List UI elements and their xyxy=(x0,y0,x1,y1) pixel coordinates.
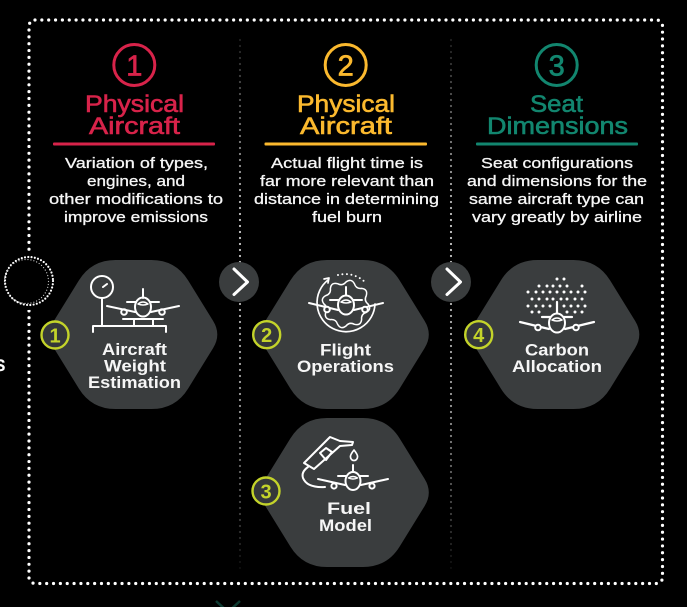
panel: Flight Operations xyxy=(253,260,429,409)
panel: Fuel Model xyxy=(252,418,429,567)
number circle 2: 2 xyxy=(338,50,354,82)
heading rule xyxy=(476,142,638,146)
heading: Physical Aircraft red: Physical xyxy=(85,91,184,118)
description: other modifications to xyxy=(49,191,223,208)
label xyxy=(319,499,372,535)
heading: Physical Aircraft yellow: Aircraft xyxy=(300,113,392,140)
panel: column 3 header xyxy=(467,44,647,226)
arrow 1 xyxy=(219,262,259,302)
number circle 3: 3 xyxy=(549,50,565,82)
label: Estimation xyxy=(88,373,181,392)
description: Actual flight time is xyxy=(271,155,423,172)
icon: plane in cycle xyxy=(309,274,383,332)
description: distance in determining xyxy=(254,191,439,208)
hexagon xyxy=(261,418,429,567)
description xyxy=(467,155,647,226)
panel: column 2 header xyxy=(254,44,439,226)
badge 1: 1 xyxy=(49,326,61,348)
description: vary greatly by airline xyxy=(472,209,642,226)
description: fuel burn xyxy=(312,209,382,226)
label: Model xyxy=(319,516,372,535)
badge 1 xyxy=(42,322,68,348)
icon: carbon cloud over plane xyxy=(520,279,594,332)
badge 2: 2 xyxy=(261,325,272,347)
label xyxy=(88,340,181,392)
heading: Seat Dimensions: Seat xyxy=(530,91,583,118)
heading: Seat Dimensions: Dimensions xyxy=(487,113,628,140)
label: Allocation xyxy=(512,357,602,376)
description: improve emissions xyxy=(64,209,208,226)
label: Flight xyxy=(320,340,371,360)
panel: column 1 header xyxy=(49,44,223,226)
number circle 2 xyxy=(325,44,366,86)
icon: scale with aircraft xyxy=(91,276,179,332)
heading: Physical Aircraft red: Aircraft xyxy=(89,113,180,140)
label: Operations xyxy=(297,357,394,376)
hexagon xyxy=(472,260,639,409)
badge 3: 3 xyxy=(260,481,272,503)
description: same aircraft type can xyxy=(469,191,644,208)
icon: fuel nozzle over plane xyxy=(303,437,388,490)
panel: Aircraft Weight Estimation xyxy=(42,260,217,409)
heading rule xyxy=(264,142,427,146)
badge 3 xyxy=(252,478,280,504)
panel: Carbon Allocation xyxy=(465,260,639,409)
heading: Physical Aircraft yellow: Physical xyxy=(297,91,395,118)
description: far more relevant than xyxy=(260,173,434,190)
label xyxy=(297,340,394,376)
label: Weight xyxy=(104,356,166,376)
column divider right xyxy=(450,40,452,570)
number circle 1 xyxy=(114,44,155,86)
dotted ring on the frame xyxy=(0,252,57,310)
number circle 1: 1 xyxy=(126,50,142,82)
bottom cropped chevron xyxy=(216,601,240,607)
heading: Physical Aircraft yellow xyxy=(297,91,395,140)
label: Carbon xyxy=(525,340,589,360)
description: Seat configurations xyxy=(481,155,633,172)
label: Aircraft xyxy=(102,340,167,359)
number circle 3 xyxy=(536,44,577,86)
hexagon xyxy=(50,260,217,409)
arrow 2 xyxy=(431,262,471,302)
badge 4: 4 xyxy=(473,325,485,347)
description xyxy=(49,155,223,226)
heading rule xyxy=(53,142,215,146)
heading: Seat Dimensions xyxy=(487,91,628,140)
badge 4 xyxy=(465,321,492,348)
heading: Physical Aircraft red xyxy=(85,91,184,140)
description: and dimensions for the xyxy=(467,173,647,190)
description: engines, and xyxy=(87,173,185,190)
column divider left xyxy=(239,40,241,570)
label: Fuel xyxy=(327,499,371,518)
badge 2 xyxy=(253,321,280,348)
description: Variation of types, xyxy=(65,155,208,172)
description xyxy=(254,155,439,226)
hexagon xyxy=(261,260,429,409)
label xyxy=(512,340,602,376)
